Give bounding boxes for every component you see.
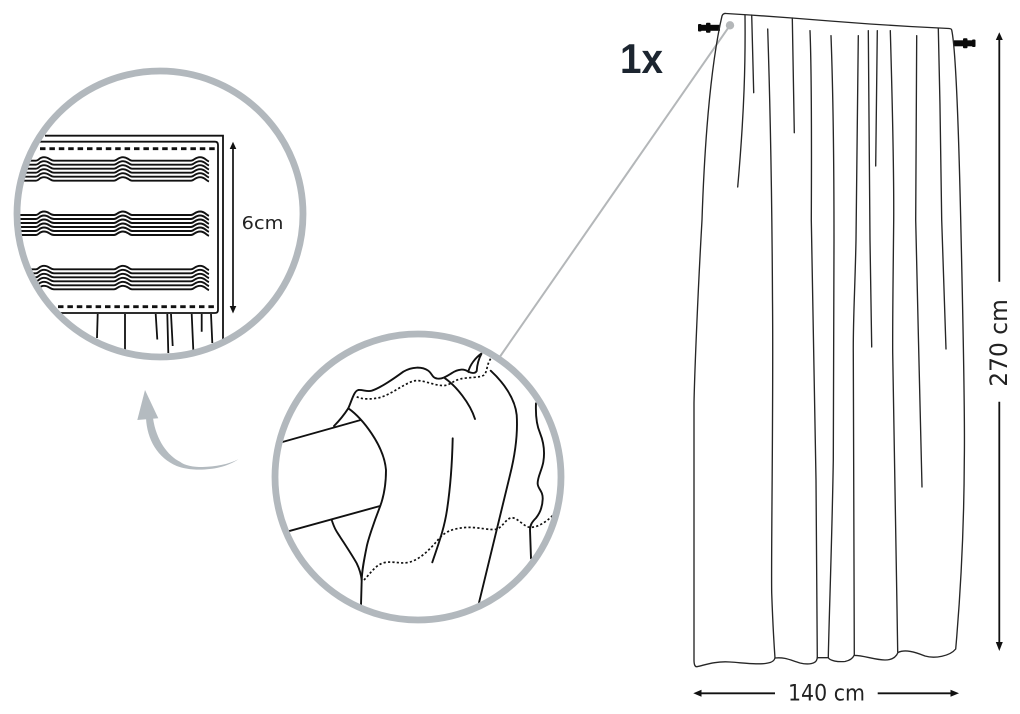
gathering cords, row 3 — [10, 266, 209, 290]
connector line from curtain corner to detail — [499, 21, 734, 358]
dimension: curtain height 270 cm: 270 cm — [985, 299, 1013, 387]
ring — [275, 334, 561, 620]
ring — [17, 71, 303, 357]
stitching: dashed lines — [40, 149, 217, 307]
gathering cords, row 1 — [10, 157, 209, 182]
icon: curved arrow — [137, 390, 238, 470]
top gathered edge — [334, 353, 482, 426]
dimension: curtain width 140 cm: 140 cm — [788, 682, 865, 707]
dimension: tape height arrow — [230, 142, 236, 314]
label: 1x quantity: 1x — [620, 35, 664, 82]
inner folds — [445, 378, 475, 419]
panel: header tape detail circle — [10, 71, 303, 357]
stitching: lower dotted line — [364, 515, 553, 580]
tape inner edge — [20, 142, 218, 313]
icon: curtain rod — [698, 23, 976, 48]
curtain illustration — [694, 13, 964, 667]
dimension: curtain width 140 cm — [693, 682, 959, 707]
right wavy edge — [530, 403, 544, 558]
panel: rod pocket detail circle — [270, 334, 561, 620]
stitching: upper dotted line — [357, 357, 492, 399]
curtain folds — [738, 15, 946, 658]
curtain outline — [694, 13, 964, 667]
label: 6cm: 6cm — [242, 213, 283, 234]
fold around rod — [348, 408, 386, 605]
lower-left fold — [332, 520, 362, 580]
tape outer edge — [45, 136, 223, 345]
gathering cords, row 2 — [10, 212, 209, 236]
dimension: curtain height 270 cm — [985, 32, 1013, 651]
rod — [282, 420, 380, 532]
fabric fold lines below tape — [97, 314, 212, 353]
